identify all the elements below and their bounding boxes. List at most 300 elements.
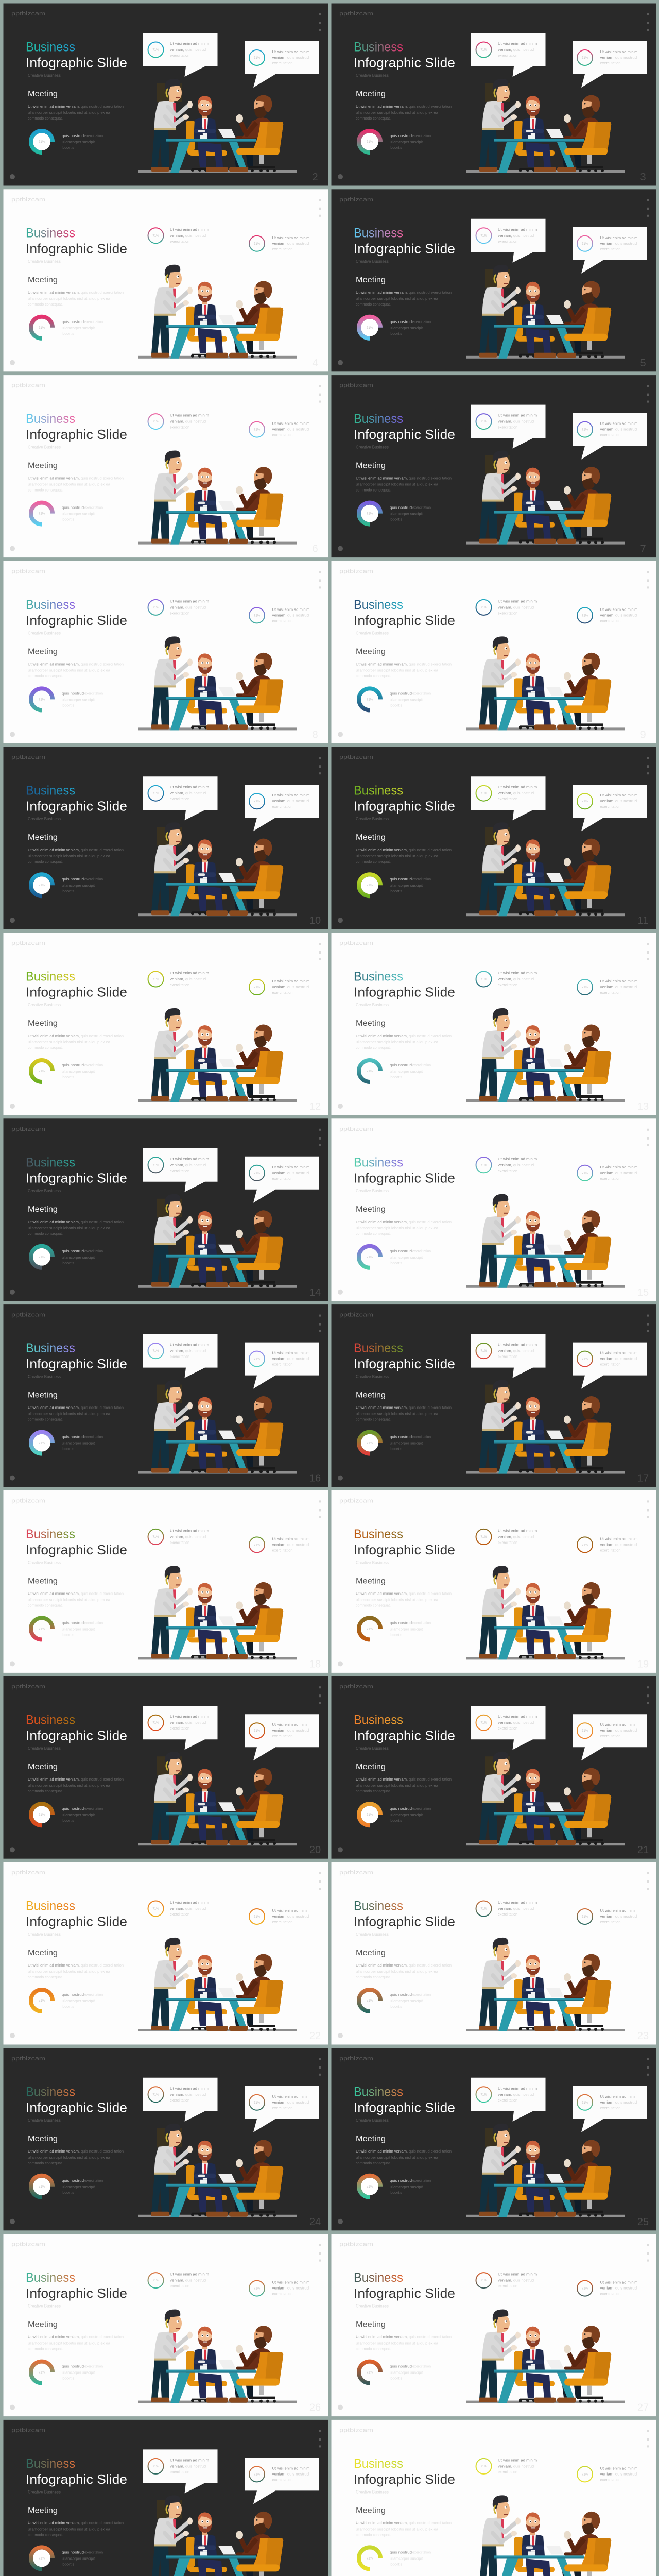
slide background [3, 747, 328, 929]
illustration: three people meeting [466, 451, 625, 545]
subheading and body copy [28, 1189, 124, 1265]
title: Business [26, 412, 75, 426]
title [26, 784, 127, 814]
slide 13 [332, 933, 656, 1115]
speech bubble right [245, 2086, 319, 2132]
title [26, 1713, 127, 1743]
title: Infographic Slide [354, 799, 455, 814]
slide background [332, 2420, 656, 2576]
title [26, 40, 127, 70]
title: Business [26, 1899, 75, 1913]
slide 3 [332, 3, 656, 185]
title: Infographic Slide [26, 1170, 127, 1185]
donut chart [31, 2176, 53, 2197]
subheading and body copy [356, 1003, 452, 1079]
page number: 8 [312, 729, 318, 740]
donut chart [359, 131, 380, 152]
title: Business [26, 970, 75, 984]
speech bubble right [245, 413, 319, 460]
donut chart [31, 1060, 53, 1082]
logo and side markers [338, 1498, 649, 1666]
slide 9 [332, 561, 656, 743]
slide 4 [3, 189, 328, 371]
title: Business [354, 2456, 403, 2471]
title: Infographic Slide [26, 241, 127, 256]
illustration: three people meeting [466, 822, 625, 916]
slide 7 [332, 375, 656, 557]
speech bubble right [573, 2272, 647, 2318]
speech bubble right [573, 1528, 647, 1574]
logo and side markers [10, 197, 321, 365]
speech bubble left [143, 2264, 217, 2308]
illustration: three people meeting [466, 2310, 625, 2403]
subheading and body copy [356, 73, 452, 150]
subheading and body copy [356, 1560, 452, 1637]
subheading and body copy [356, 1189, 452, 1265]
illustration: three people meeting [138, 79, 297, 173]
slide 2 [3, 3, 328, 185]
subheading and body copy [28, 259, 124, 336]
subheading and body copy [28, 817, 124, 893]
speech bubble right [573, 1343, 647, 1389]
slide background [3, 375, 328, 557]
donut chart [31, 317, 53, 338]
title: Infographic Slide [354, 2471, 455, 2487]
illustration: three people meeting [466, 1938, 625, 2031]
title [354, 1899, 455, 1929]
donut chart [31, 1246, 53, 1268]
logo and side markers [338, 754, 649, 923]
subheading and body copy [356, 259, 452, 336]
page number: 17 [637, 1473, 649, 1484]
title: Business [26, 784, 75, 798]
illustration: three people meeting [466, 1752, 625, 1845]
slide background [3, 1862, 328, 2044]
donut chart [359, 1246, 380, 1268]
slide 22 [3, 1862, 328, 2044]
illustration: three people meeting [466, 636, 625, 730]
title: Infographic Slide [354, 1170, 455, 1185]
speech bubble left [143, 33, 217, 77]
speech bubble left [471, 1520, 546, 1564]
title: Business [354, 1341, 403, 1355]
speech bubble left [143, 1148, 217, 1192]
title: Business [26, 1713, 75, 1727]
title: Business [354, 784, 403, 798]
subheading and body copy [356, 2489, 452, 2566]
slide background [3, 1676, 328, 1859]
page number: 22 [309, 2030, 321, 2042]
title [354, 784, 455, 814]
title [26, 2456, 127, 2487]
title: Infographic Slide [26, 799, 127, 814]
illustration: three people meeting [466, 1008, 625, 1102]
speech bubble right [573, 1157, 647, 1203]
title: Infographic Slide [26, 1913, 127, 1929]
speech bubble right [245, 1900, 319, 1946]
logo and side markers [10, 2056, 321, 2224]
subheading and body copy [28, 2489, 124, 2566]
illustration: three people meeting [138, 1194, 297, 1288]
title [354, 412, 455, 442]
page number: 13 [637, 1101, 649, 1112]
logo and side markers [10, 1498, 321, 1666]
logo and side markers [338, 2056, 649, 2224]
speech bubble left [143, 405, 217, 449]
speech bubble left [143, 590, 217, 634]
slide background [3, 561, 328, 743]
speech bubble right [573, 2458, 647, 2504]
donut chart [31, 503, 53, 524]
subheading and body copy [28, 631, 124, 707]
title: Business [26, 1527, 75, 1541]
title: Infographic Slide [26, 1542, 127, 1557]
logo and side markers [10, 1684, 321, 1852]
speech bubble left [471, 590, 546, 634]
title: Infographic Slide [354, 1728, 455, 1743]
title: Infographic Slide [26, 2471, 127, 2487]
page number: 4 [312, 358, 318, 369]
title [26, 2270, 127, 2301]
slide 26 [3, 2234, 328, 2416]
title: Business [354, 226, 403, 240]
illustration: three people meeting [466, 265, 625, 359]
logo and side markers [338, 1684, 649, 1852]
slide background [3, 2048, 328, 2230]
subheading and body copy [28, 1932, 124, 2009]
logo and side markers [338, 2427, 649, 2576]
logo and side markers [338, 1870, 649, 2038]
title [354, 226, 455, 256]
speech bubble right [573, 413, 647, 460]
donut chart [31, 1432, 53, 1454]
page number: 14 [309, 1287, 321, 1298]
subheading and body copy [356, 631, 452, 707]
speech bubble left [143, 1706, 217, 1750]
donut chart [31, 874, 53, 896]
illustration: three people meeting [138, 636, 297, 730]
page number: 26 [309, 2402, 321, 2414]
slide 23 [332, 1862, 656, 2044]
speech bubble left [471, 1706, 546, 1750]
speech bubble right [245, 227, 319, 274]
donut chart [31, 2547, 53, 2569]
logo and side markers [338, 940, 649, 1109]
speech bubble left [143, 2449, 217, 2493]
title: Business [26, 226, 75, 240]
title: Business [26, 2270, 75, 2285]
title: Infographic Slide [26, 55, 127, 70]
logo and side markers [10, 754, 321, 923]
donut chart [359, 1432, 380, 1454]
illustration: three people meeting [138, 1752, 297, 1845]
speech bubble left [143, 776, 217, 820]
speech bubble left [471, 2449, 546, 2493]
slide 5 [332, 189, 656, 371]
slide 6 [3, 375, 328, 557]
illustration: three people meeting [138, 1938, 297, 2031]
speech bubble right [573, 227, 647, 274]
page number: 12 [309, 1101, 321, 1112]
slide background [3, 933, 328, 1115]
title: Business [354, 598, 403, 612]
page number: 3 [640, 172, 646, 183]
slide 8 [3, 561, 328, 743]
logo and side markers [10, 1126, 321, 1295]
donut chart [359, 1990, 380, 2011]
slide background [332, 1676, 656, 1859]
title [26, 970, 127, 999]
slide 18 [3, 1490, 328, 1673]
speech bubble left [143, 1520, 217, 1564]
title: Business [26, 2084, 75, 2099]
title: Infographic Slide [26, 613, 127, 628]
speech bubble right [573, 1900, 647, 1946]
slide background [332, 1490, 656, 1673]
title: Infographic Slide [26, 984, 127, 999]
title [354, 1527, 455, 1557]
donut chart [31, 1990, 53, 2011]
subheading and body copy [356, 445, 452, 522]
title [26, 1155, 127, 1185]
speech bubble left [471, 1892, 546, 1936]
title: Infographic Slide [354, 613, 455, 628]
illustration: three people meeting [138, 822, 297, 916]
title: Business [354, 1527, 403, 1541]
logo and side markers [10, 11, 321, 179]
logo and side markers [338, 1312, 649, 1481]
slide background [332, 1304, 656, 1487]
title [26, 1527, 127, 1557]
speech bubble right [245, 599, 319, 645]
speech bubble right [245, 785, 319, 831]
slide background [332, 933, 656, 1115]
speech bubble right [573, 1714, 647, 1760]
slide background [332, 189, 656, 371]
title [354, 1713, 455, 1743]
title [26, 412, 127, 442]
logo and side markers [338, 383, 649, 551]
speech bubble left [471, 1148, 546, 1192]
title: Business [354, 2084, 403, 2099]
page number: 25 [637, 2216, 649, 2228]
slide 25 [332, 2048, 656, 2230]
illustration: three people meeting [138, 451, 297, 545]
slide background [332, 561, 656, 743]
logo and side markers [10, 940, 321, 1109]
speech bubble left [143, 962, 217, 1006]
donut chart [359, 317, 380, 338]
logo and side markers [10, 1870, 321, 2038]
slide 16 [3, 1304, 328, 1487]
speech bubble left [143, 2078, 217, 2122]
subheading and body copy [356, 2118, 452, 2195]
speech bubble left [471, 2264, 546, 2308]
slide 10 [3, 747, 328, 929]
title: Infographic Slide [354, 2285, 455, 2301]
slide 14 [3, 1118, 328, 1301]
title: Business [26, 40, 75, 55]
slide background [3, 1304, 328, 1487]
slide 24 [3, 2048, 328, 2230]
illustration: three people meeting [138, 1008, 297, 1102]
title [354, 40, 455, 70]
slide 28 [3, 2420, 328, 2576]
logo and side markers [10, 383, 321, 551]
logo and side markers [10, 2427, 321, 2576]
subheading and body copy [356, 2304, 452, 2381]
speech bubble left [471, 962, 546, 1006]
slide background [332, 375, 656, 557]
subheading and body copy [356, 1375, 452, 1451]
speech bubble right [573, 785, 647, 831]
title: Infographic Slide [26, 427, 127, 442]
title: Infographic Slide [26, 1728, 127, 1743]
page number: 2 [312, 172, 318, 183]
illustration: three people meeting [138, 2124, 297, 2217]
illustration: three people meeting [466, 1194, 625, 1288]
donut chart [359, 503, 380, 524]
speech bubble right [245, 41, 319, 88]
page number: 15 [637, 1287, 649, 1298]
slide background [3, 1118, 328, 1301]
subheading and body copy [28, 1746, 124, 1823]
page number: 9 [640, 729, 646, 740]
title: Business [354, 970, 403, 984]
slide background [332, 1862, 656, 2044]
title: Business [354, 2270, 403, 2285]
page number: 27 [637, 2402, 649, 2414]
title [26, 1899, 127, 1929]
donut chart [359, 688, 380, 710]
speech bubble right [573, 41, 647, 88]
slide background [332, 2048, 656, 2230]
title [26, 226, 127, 256]
donut chart [31, 1618, 53, 1639]
title [354, 970, 455, 999]
title: Infographic Slide [354, 1913, 455, 1929]
page number: 24 [309, 2216, 321, 2228]
slide 11 [332, 747, 656, 929]
donut chart [31, 131, 53, 152]
logo and side markers [10, 1312, 321, 1481]
speech bubble left [143, 1892, 217, 1936]
subheading and body copy [356, 817, 452, 893]
subheading and body copy [28, 73, 124, 150]
slide background [3, 2234, 328, 2416]
speech bubble right [245, 2458, 319, 2504]
title: Infographic Slide [354, 984, 455, 999]
title: Infographic Slide [26, 1356, 127, 1371]
illustration: three people meeting [138, 1566, 297, 1659]
title: Infographic Slide [26, 2285, 127, 2301]
speech bubble left [471, 219, 546, 263]
slide 17 [332, 1304, 656, 1487]
title [354, 2456, 455, 2487]
slide background [3, 2420, 328, 2576]
speech bubble left [471, 2078, 546, 2122]
page number: 23 [637, 2030, 649, 2042]
donut chart [31, 2362, 53, 2383]
title: Infographic Slide [354, 1356, 455, 1371]
title: Business [26, 598, 75, 612]
donut chart [359, 1618, 380, 1639]
title: Business [354, 1155, 403, 1170]
subheading and body copy [356, 1746, 452, 1823]
slide 12 [3, 933, 328, 1115]
title [26, 598, 127, 628]
speech bubble right [245, 1714, 319, 1760]
speech bubble right [573, 599, 647, 645]
donut chart [359, 2176, 380, 2197]
subheading and body copy [28, 1560, 124, 1637]
speech bubble right [573, 971, 647, 1017]
title: Infographic Slide [354, 1542, 455, 1557]
slide background [3, 3, 328, 185]
logo and side markers [338, 1126, 649, 1295]
page number: 10 [309, 915, 321, 926]
page number: 11 [638, 915, 648, 926]
speech bubble right [245, 1343, 319, 1389]
title: Business [26, 2456, 75, 2471]
logo and side markers [338, 11, 649, 179]
speech bubble left [471, 405, 546, 449]
title: Business [26, 1341, 75, 1355]
slide 27 [332, 2234, 656, 2416]
slide background [332, 3, 656, 185]
speech bubble left [143, 1334, 217, 1378]
illustration: three people meeting [138, 1380, 297, 1474]
page number: 18 [309, 1658, 321, 1670]
slide background [332, 2234, 656, 2416]
illustration: three people meeting [138, 265, 297, 359]
speech bubble right [245, 1528, 319, 1574]
logo and side markers [10, 568, 321, 737]
subheading and body copy [28, 2118, 124, 2195]
speech bubble left [471, 776, 546, 820]
page number: 20 [309, 1844, 321, 1856]
illustration: three people meeting [138, 2495, 297, 2576]
speech bubble right [573, 2086, 647, 2132]
slide 21 [332, 1676, 656, 1859]
title: Business [354, 412, 403, 426]
donut chart [359, 1804, 380, 1825]
title: Infographic Slide [26, 2099, 127, 2115]
speech bubble left [471, 1334, 546, 1378]
title [354, 2084, 455, 2115]
subheading and body copy [356, 1932, 452, 2009]
logo and side markers [338, 568, 649, 737]
illustration: three people meeting [466, 1566, 625, 1659]
title: Infographic Slide [354, 2099, 455, 2115]
page number: 6 [312, 544, 318, 555]
page number: 19 [637, 1658, 649, 1670]
title: Business [354, 40, 403, 55]
slide background [332, 747, 656, 929]
title: Business [26, 1155, 75, 1170]
speech bubble right [245, 2272, 319, 2318]
title [354, 1155, 455, 1185]
donut chart [359, 2547, 380, 2569]
slide 20 [3, 1676, 328, 1859]
illustration: three people meeting [466, 1380, 625, 1474]
page number: 21 [637, 1844, 649, 1856]
subheading and body copy [28, 1003, 124, 1079]
subheading and body copy [28, 445, 124, 522]
title: Business [354, 1899, 403, 1913]
donut chart [359, 874, 380, 896]
logo and side markers [338, 2242, 649, 2410]
